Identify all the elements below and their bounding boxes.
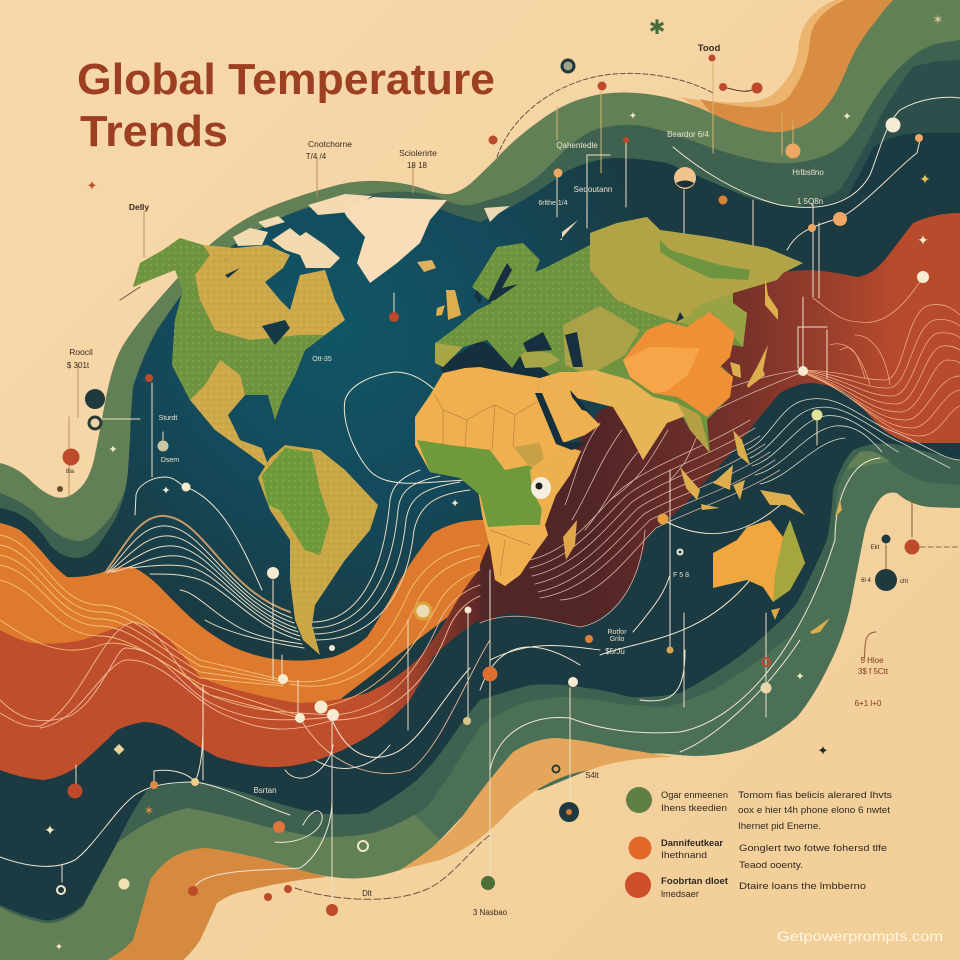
new guinea [760, 490, 805, 515]
label group: pale: 1 5Q8n [797, 197, 823, 206]
central asia khaki [563, 306, 640, 375]
australia base [713, 520, 805, 602]
label group: cream dark: 3 Nasbao [473, 908, 508, 917]
dashed curve top [497, 73, 713, 157]
node group: stars: ✶ [933, 12, 943, 27]
uk [446, 290, 461, 320]
title [77, 55, 495, 156]
eurasia [435, 217, 803, 460]
new zealand south [810, 618, 830, 634]
node: split circle [674, 167, 696, 189]
label group: pale: 6rlthe 1/4 [538, 200, 568, 207]
label group: cream dark: Roocil [69, 347, 93, 357]
label group: pale: F 5 8 [673, 572, 689, 579]
node: center orange dot [566, 809, 572, 815]
label group: cream dark: Sciolerirte [399, 148, 437, 158]
label group: cream dark: Ekt [871, 545, 880, 551]
node group: dark circles [57, 389, 897, 890]
south america base [258, 445, 378, 655]
iceland [417, 260, 436, 272]
texture [435, 240, 695, 350]
borders [435, 395, 540, 575]
label group: pale [159, 130, 824, 795]
africa [415, 367, 600, 586]
node group: stars: ✦ [795, 671, 805, 683]
node group: stars: ✦ [108, 444, 118, 456]
label group: pale: $5/Ju [605, 647, 625, 656]
label group: cream dark: Delly [129, 202, 149, 212]
band: bottom orange [107, 848, 327, 960]
legend item 1 description: Tomom fias belicis alerared Ihvts [738, 790, 892, 801]
siberia green strip [660, 240, 750, 280]
sulawesi [733, 480, 745, 500]
band: lower right green [400, 460, 960, 840]
east africa tan [530, 445, 581, 515]
legend [625, 787, 892, 899]
node group: stars: ✦ [818, 743, 829, 758]
node group: pale orange [150, 134, 923, 833]
label group: pale: Dsem [161, 457, 179, 464]
dashed line right [920, 546, 960, 548]
novaya zemlya [560, 220, 578, 240]
world map [130, 194, 842, 655]
sahel khaki [513, 443, 545, 467]
east russia olive [680, 293, 747, 347]
lines: navy wave family left [105, 470, 470, 648]
lines: orange band [0, 535, 480, 718]
node group: stars: ✦ [450, 498, 460, 510]
greenland [343, 197, 447, 283]
tasmania [771, 608, 780, 620]
small labels [66, 43, 908, 917]
lines: rust band [0, 585, 490, 773]
australia [713, 520, 805, 620]
watermark: Getpowerprompts.com [777, 929, 943, 944]
japan [747, 345, 768, 388]
label group: cream dark: $ 301t [67, 361, 90, 370]
philippines [733, 430, 750, 465]
node: star top green: ✱ [649, 17, 665, 39]
node group: stars: ✦ [55, 942, 63, 953]
eye marker [531, 477, 551, 499]
node group: stars: ✶ [144, 803, 154, 818]
label group: cream dark: Tood [698, 43, 720, 54]
arctic islands [233, 194, 372, 268]
south east asia [677, 403, 710, 453]
australia east [773, 520, 805, 602]
lines: vertical drop lines [62, 63, 827, 905]
label group: pale: Rotfor [607, 629, 627, 636]
java [701, 504, 720, 510]
label group: cream dark: 6+1 l+0 [855, 699, 882, 708]
siberia khaki [590, 217, 803, 323]
legend item 2 title: Dannifeutkear [661, 838, 723, 848]
legend item 1 description [738, 790, 892, 832]
label group: pale: Bsrtan [253, 786, 277, 795]
africa base [415, 367, 581, 586]
new zealand north [835, 500, 842, 517]
great lakes [222, 256, 290, 345]
node group: rings [57, 550, 770, 894]
ireland [436, 305, 445, 316]
central africa green [417, 440, 545, 527]
label group: cream dark: Dlt [362, 889, 373, 898]
label group: pale: Qahentedle [556, 141, 598, 150]
legend item 1 title: Ogar enmeenen [661, 790, 728, 800]
north america green [133, 238, 325, 420]
islands [436, 206, 842, 634]
legend item 2 sub: Ihethnand [661, 850, 707, 860]
legend swatch: green [626, 787, 652, 813]
lines: right rust fan [803, 277, 960, 436]
south asia [570, 370, 688, 460]
spain khaki [435, 343, 463, 367]
label group: pale: Ott-35 [312, 356, 332, 363]
label group: cream dark: 18 18 [407, 161, 428, 170]
node group: stars: ✦ [919, 171, 931, 187]
korea [730, 362, 741, 378]
seas [474, 263, 684, 367]
madagascar [563, 520, 577, 560]
label group: pale: Grilo [610, 636, 624, 643]
legend item 1 description: oox e hier t4h phone elono 6 nwtet [738, 805, 890, 816]
label group: cream dark: Cnotchorne [308, 139, 352, 149]
node: gold ring [415, 603, 431, 619]
label group: pale: Sturdt [159, 415, 177, 422]
label group: cream dark: 3$ f 5Ctt [858, 667, 889, 676]
legend swatch: orange [628, 836, 652, 860]
label group: pale: Hrlbstlno [792, 168, 824, 177]
arabia [537, 372, 600, 443]
label group: cream dark [66, 43, 908, 917]
mediterranean [440, 340, 550, 390]
band: rust [0, 560, 496, 780]
lines: navy right [747, 399, 960, 484]
label group: pale: Sedoutann [574, 185, 612, 194]
node group: stars: ✦ [842, 111, 852, 123]
china [623, 312, 735, 417]
title line 2: Trends [80, 107, 228, 156]
label group: cream dark: 6l 4 [861, 578, 871, 584]
node group: stars: ✦ [629, 111, 637, 122]
node: top dark ring [562, 60, 574, 72]
south america [255, 445, 380, 655]
legend item 2 description: Gonglert two fotwe fohersd tlfe [739, 843, 887, 854]
red drop line right [864, 500, 912, 660]
node group: stars: ✦ [161, 485, 171, 497]
legend item 3 description: Dtaire loans the lmbberno [739, 881, 866, 892]
legend swatch: rust [625, 872, 651, 898]
sakhalin [765, 275, 778, 320]
dashed curve bottom [295, 835, 490, 899]
eurasia base green [435, 217, 803, 460]
north america [130, 194, 372, 475]
node group: stars: ✦ [917, 232, 929, 248]
node group: stars: ✦ [44, 822, 56, 838]
legend item 1 description: Ihernet pid Enerne. [738, 821, 821, 832]
legend item 3 title: Foobrtan dloet [661, 876, 728, 886]
svalbard [484, 206, 510, 222]
node group: pale cream [118, 118, 929, 890]
label group: cream dark: T/4 /4 [306, 152, 327, 161]
band: orange [0, 520, 495, 730]
node group: stars: ◆ [114, 740, 125, 756]
turkey khaki [520, 350, 560, 368]
texture [136, 240, 344, 464]
legend item 2 description: Teaod ooenty. [739, 860, 803, 871]
north america base [133, 238, 345, 470]
band: upper right deep green [560, 60, 960, 260]
node group: stars: ✦ [87, 178, 98, 193]
borneo [713, 465, 733, 490]
curve top right short [723, 87, 752, 91]
legend item 1 sub: Ihens tkeedien [661, 803, 727, 813]
red sea [535, 390, 590, 450]
band: lower tan [400, 738, 673, 870]
legend item 3 sub: lmedsaer [661, 889, 699, 899]
title line 1: Global Temperature [77, 55, 495, 104]
amazon green [262, 448, 330, 555]
label group: cream dark: S4lt [585, 771, 600, 780]
band: top right tan [680, 0, 893, 140]
line alaska tail [120, 287, 140, 300]
eye dot [536, 482, 542, 490]
label group: cream dark: cht [900, 579, 908, 585]
band: top right orange [700, 0, 893, 150]
sumatra [680, 467, 700, 500]
label group: cream dark: 5 Hloe [860, 656, 884, 665]
split circle body [674, 167, 696, 189]
lines: maroon fan [480, 370, 803, 627]
band: maroon to rust [480, 213, 960, 627]
texture [255, 445, 380, 605]
label group: pale: Beardor 6/4 [667, 130, 709, 139]
china light [623, 347, 700, 393]
legend item 2 description [739, 843, 887, 871]
label group: cream dark: 8la [66, 469, 75, 475]
split circle lower [676, 180, 694, 188]
